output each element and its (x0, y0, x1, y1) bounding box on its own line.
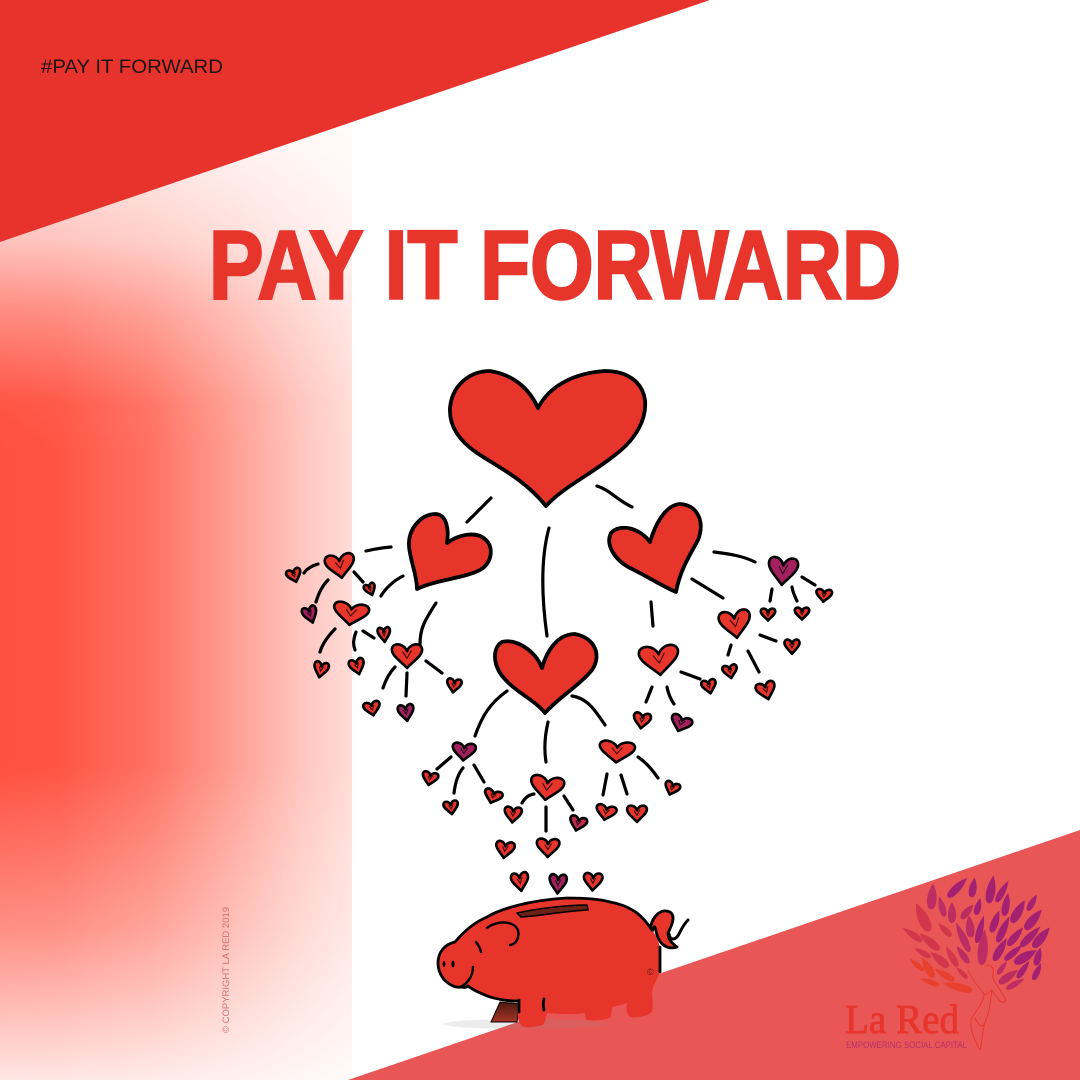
heart tree diagram (285, 371, 832, 894)
pig outline (438, 898, 660, 1012)
pig tail (650, 911, 688, 948)
pig slot (517, 905, 588, 917)
pig ear (487, 922, 518, 945)
center medium heart (495, 634, 597, 713)
logo figure (968, 965, 1006, 1050)
large top heart (450, 371, 645, 506)
left medium heart (409, 514, 491, 589)
pig far leg (491, 1002, 520, 1022)
falling hearts (495, 838, 603, 894)
small hearts: center cluster (421, 740, 681, 833)
copyright note: © COPYRIGHT LA RED 2019 (221, 907, 231, 1033)
pig shadow (443, 1019, 607, 1029)
hashtag: #PAY IT FORWARD (41, 56, 223, 78)
logo: La Red (845, 874, 1053, 1050)
coral triangle: bottom right (348, 830, 1080, 1080)
gradient panel: left (0, 100, 352, 1080)
title: PAY IT FORWARD (209, 210, 901, 320)
logo tagline: EMPOWERING SOCIAL CAPITAL (846, 1040, 967, 1050)
pig body (438, 898, 660, 1027)
copyright mark on pig: © (647, 967, 654, 977)
logo tree leaves (901, 874, 1053, 995)
small hearts: right cluster (632, 556, 832, 735)
logo wordmark: La Red (845, 996, 959, 1042)
right medium heart (609, 504, 701, 592)
connector lines (304, 486, 815, 831)
small hearts: left cluster (285, 552, 462, 722)
piggy bank (438, 898, 688, 1029)
pig nostrils (443, 961, 455, 967)
red triangle: top left (0, 0, 710, 242)
pig face (460, 942, 481, 987)
